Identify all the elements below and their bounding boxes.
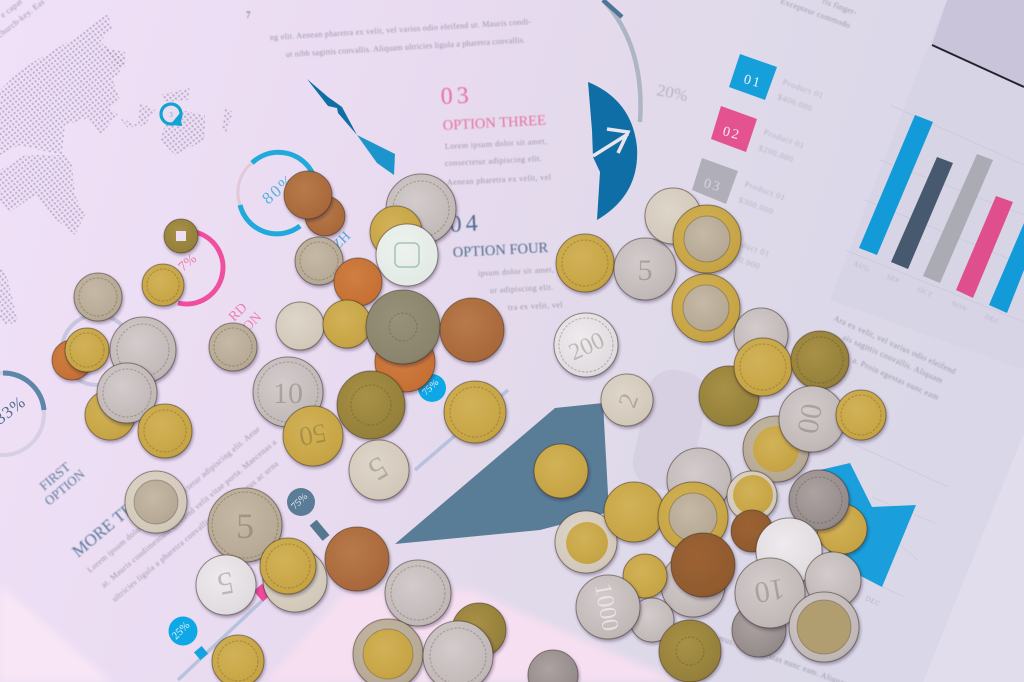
coin: [534, 444, 588, 498]
bowtie graphic: [307, 79, 395, 175]
heading marker: 7: [246, 10, 251, 20]
coin: [671, 533, 735, 597]
coin: [732, 603, 786, 657]
badge: 75 percent cyan: [418, 374, 446, 402]
coin: [440, 298, 504, 362]
legend item 03: 03: [702, 176, 723, 196]
coin: [731, 510, 773, 552]
dotted world map: [0, 14, 233, 325]
coin: 5: [215, 565, 237, 603]
ring: 7 percent: [176, 232, 223, 304]
coin: [630, 598, 674, 642]
ring: 80 percent: [238, 152, 317, 234]
bimetal coin: [789, 592, 859, 662]
coin: [110, 317, 176, 383]
coin with square hole: [164, 219, 198, 253]
20 percent label: 20%: [655, 80, 690, 105]
option four: OPTION FOUR: [452, 240, 549, 261]
coin: [376, 224, 438, 286]
coin: [375, 332, 435, 392]
coin: [349, 440, 409, 500]
month labels: DEC: [983, 313, 1001, 326]
bimetal coin: [672, 274, 740, 342]
coin: [444, 381, 506, 443]
bimetal coin: [125, 471, 187, 533]
legend item 01: Product 01: [781, 76, 825, 101]
more text block: Lorem ipsum dolor sit amet, consectetur adipiscing elit. Aene: [86, 424, 262, 575]
ring: third option: ZH: [330, 229, 354, 253]
option three: 03: [440, 83, 473, 110]
legend item 04: duct 01: [740, 239, 771, 259]
coin: [85, 390, 135, 440]
more text block: MORE TEXT: [68, 484, 155, 561]
option three: OPTION THREE: [442, 113, 546, 134]
coins: upper centre cluster: [253, 171, 506, 500]
top centre paragraph: ng elit. Aenean pharetra ex velit, vel varius odio eleifend ut. Mauris condi-: [270, 17, 532, 42]
ring: third option: ON: [240, 310, 265, 335]
legend item 03: [692, 158, 787, 216]
legend item 03: Product 01: [743, 178, 787, 203]
coin: [659, 620, 721, 682]
legend item 01: 01: [742, 72, 763, 92]
more text block: ultricies ligula a pharetra convallis. Aliquam lectus ac urna: [111, 459, 280, 604]
coin: [554, 313, 618, 377]
coin: [260, 538, 316, 594]
month labels: NOV: [950, 300, 969, 314]
coin: 5: [363, 450, 394, 489]
coin: [284, 171, 332, 219]
badge: 75 percent cyan: 75%: [420, 377, 441, 398]
coin: [661, 553, 725, 617]
map pin: 3: [169, 111, 173, 119]
option three: Aenean pharetra ex velit, vel: [447, 173, 552, 187]
legend item 04: [737, 239, 771, 271]
legend: [692, 54, 825, 271]
option four: ur adipiscing elit.: [490, 283, 554, 295]
coin: [645, 188, 701, 244]
option four: 04: [449, 210, 482, 238]
coin: [196, 555, 256, 615]
coin: [385, 560, 451, 626]
coin: [601, 374, 653, 426]
coin: [283, 406, 343, 466]
bars: [859, 115, 1024, 313]
blue pie with arrow: [588, 82, 637, 220]
option four: [449, 210, 563, 312]
badge: 25 percent: 25%: [170, 619, 192, 642]
coins: lower right cluster: [534, 444, 867, 682]
coin: [366, 290, 440, 364]
coin: [323, 300, 371, 348]
coins: lower left cluster: [196, 488, 578, 682]
coin: [138, 404, 192, 458]
legend item 01: [729, 54, 825, 113]
coin: [805, 552, 861, 608]
coin: [699, 366, 759, 426]
ring: third option: [62, 229, 354, 385]
coin: [756, 518, 822, 584]
coin: [208, 488, 282, 562]
timeline: [168, 374, 508, 680]
coin: [276, 302, 324, 350]
legend item 02: [711, 106, 806, 164]
coin: 2: [613, 389, 644, 412]
coin: [142, 264, 184, 306]
right paragraph: Ara ex velit, vel varius odio eleifend: [832, 314, 957, 376]
coin: [735, 558, 805, 628]
coin: [370, 206, 422, 258]
coin: [337, 371, 405, 439]
coin: [836, 390, 886, 440]
month labels: [852, 260, 1001, 326]
bimetal coin: [673, 205, 741, 273]
legend item 04: 0.000: [737, 254, 762, 271]
ring: 80 percent: 80%: [258, 170, 299, 208]
coins: left cluster: [52, 219, 257, 533]
coin: [452, 603, 506, 657]
marker: cyan: [194, 646, 208, 660]
right paragraph: a. Proin egestas nunc eam: [851, 356, 941, 402]
coin: [576, 575, 640, 639]
marker: pink: [254, 584, 271, 602]
coin: [556, 234, 614, 292]
legend item 03: $300.000: [737, 194, 775, 216]
coin: [817, 504, 867, 554]
coin: [305, 196, 345, 236]
badge: 25 percent: [168, 616, 198, 646]
coin: 00: [791, 401, 828, 436]
coin: [791, 331, 849, 389]
month labels: OCT: [916, 286, 934, 299]
legend item 02: Product 01: [762, 126, 806, 151]
blue area chart: DEC: [864, 595, 882, 608]
coin: 1000: [589, 581, 623, 633]
coin: [386, 174, 456, 244]
legend item 01: $400.000: [776, 91, 814, 113]
legend item 02: $200.000: [757, 142, 795, 164]
coin: 10: [273, 377, 303, 410]
badge: 75 percent dark: 75%: [289, 491, 310, 512]
bar chart: [845, 45, 1024, 326]
coin: 5: [236, 506, 254, 546]
coin: [789, 470, 849, 530]
month labels: AUG: [852, 260, 871, 274]
right paragraph: ais sagittis convallis. Aliquam: [841, 333, 945, 385]
bimetal coin: [743, 416, 809, 482]
coin: [65, 328, 109, 372]
option three: Lorem ipsum dolor sit amet,: [445, 137, 547, 151]
coin: [614, 238, 676, 300]
pale reflection: [628, 365, 712, 495]
coin: [604, 482, 664, 542]
coin: [74, 273, 122, 321]
coin: [623, 554, 667, 598]
coin: [555, 511, 617, 573]
coin: [209, 323, 257, 371]
option three: consectetur adipiscing elit.: [445, 154, 542, 168]
ring: 7 percent: 7%: [176, 251, 200, 275]
legend item 02: 02: [721, 124, 742, 144]
coin: [779, 386, 845, 452]
coin: [212, 635, 264, 682]
coin: [727, 471, 777, 521]
blue area chart: [820, 440, 948, 608]
coin: [97, 363, 157, 423]
big ring arc: [603, 0, 641, 122]
more text block: at. Mauris condimentum eleifend velit vitae porta. Maecenas a: [100, 437, 278, 590]
badge: 75 percent dark: [287, 488, 315, 516]
coin: 200: [565, 327, 609, 366]
ring: 33 percent: [0, 373, 44, 455]
coin: [334, 258, 382, 306]
coin: [734, 338, 792, 396]
coin: [325, 527, 389, 591]
option three: [440, 83, 552, 187]
top centre paragraph: ut nibh sagittis convallis. Aliquam ultricies ligula a pharetra convallis.: [286, 35, 526, 59]
coin: 5: [638, 254, 652, 287]
coins: upper right cluster: [554, 188, 886, 482]
coin: [295, 237, 343, 285]
bimetal coin: [353, 619, 423, 682]
bimetal coin: [658, 482, 728, 552]
blue-grey triangle: [395, 403, 609, 544]
map pin: [161, 104, 182, 126]
month labels: SEP: [885, 273, 901, 285]
option four: ipsum dolor sit amet,: [478, 265, 554, 278]
coin: [528, 650, 578, 682]
coin: [667, 448, 731, 512]
coin: [734, 308, 788, 362]
coin: 10: [752, 572, 787, 609]
first option heading: OPTION: [41, 466, 88, 508]
option four: tra ex velit, vel: [508, 300, 563, 312]
coin: [263, 548, 327, 612]
ring: third option: RD: [226, 300, 251, 325]
marker: dark: [310, 520, 329, 541]
top centre paragraph: [270, 17, 532, 59]
coin: [423, 621, 493, 682]
coin: [253, 357, 323, 427]
coin: [52, 340, 92, 380]
first option heading: FIRST: [36, 459, 73, 493]
coin: 50: [297, 418, 329, 452]
